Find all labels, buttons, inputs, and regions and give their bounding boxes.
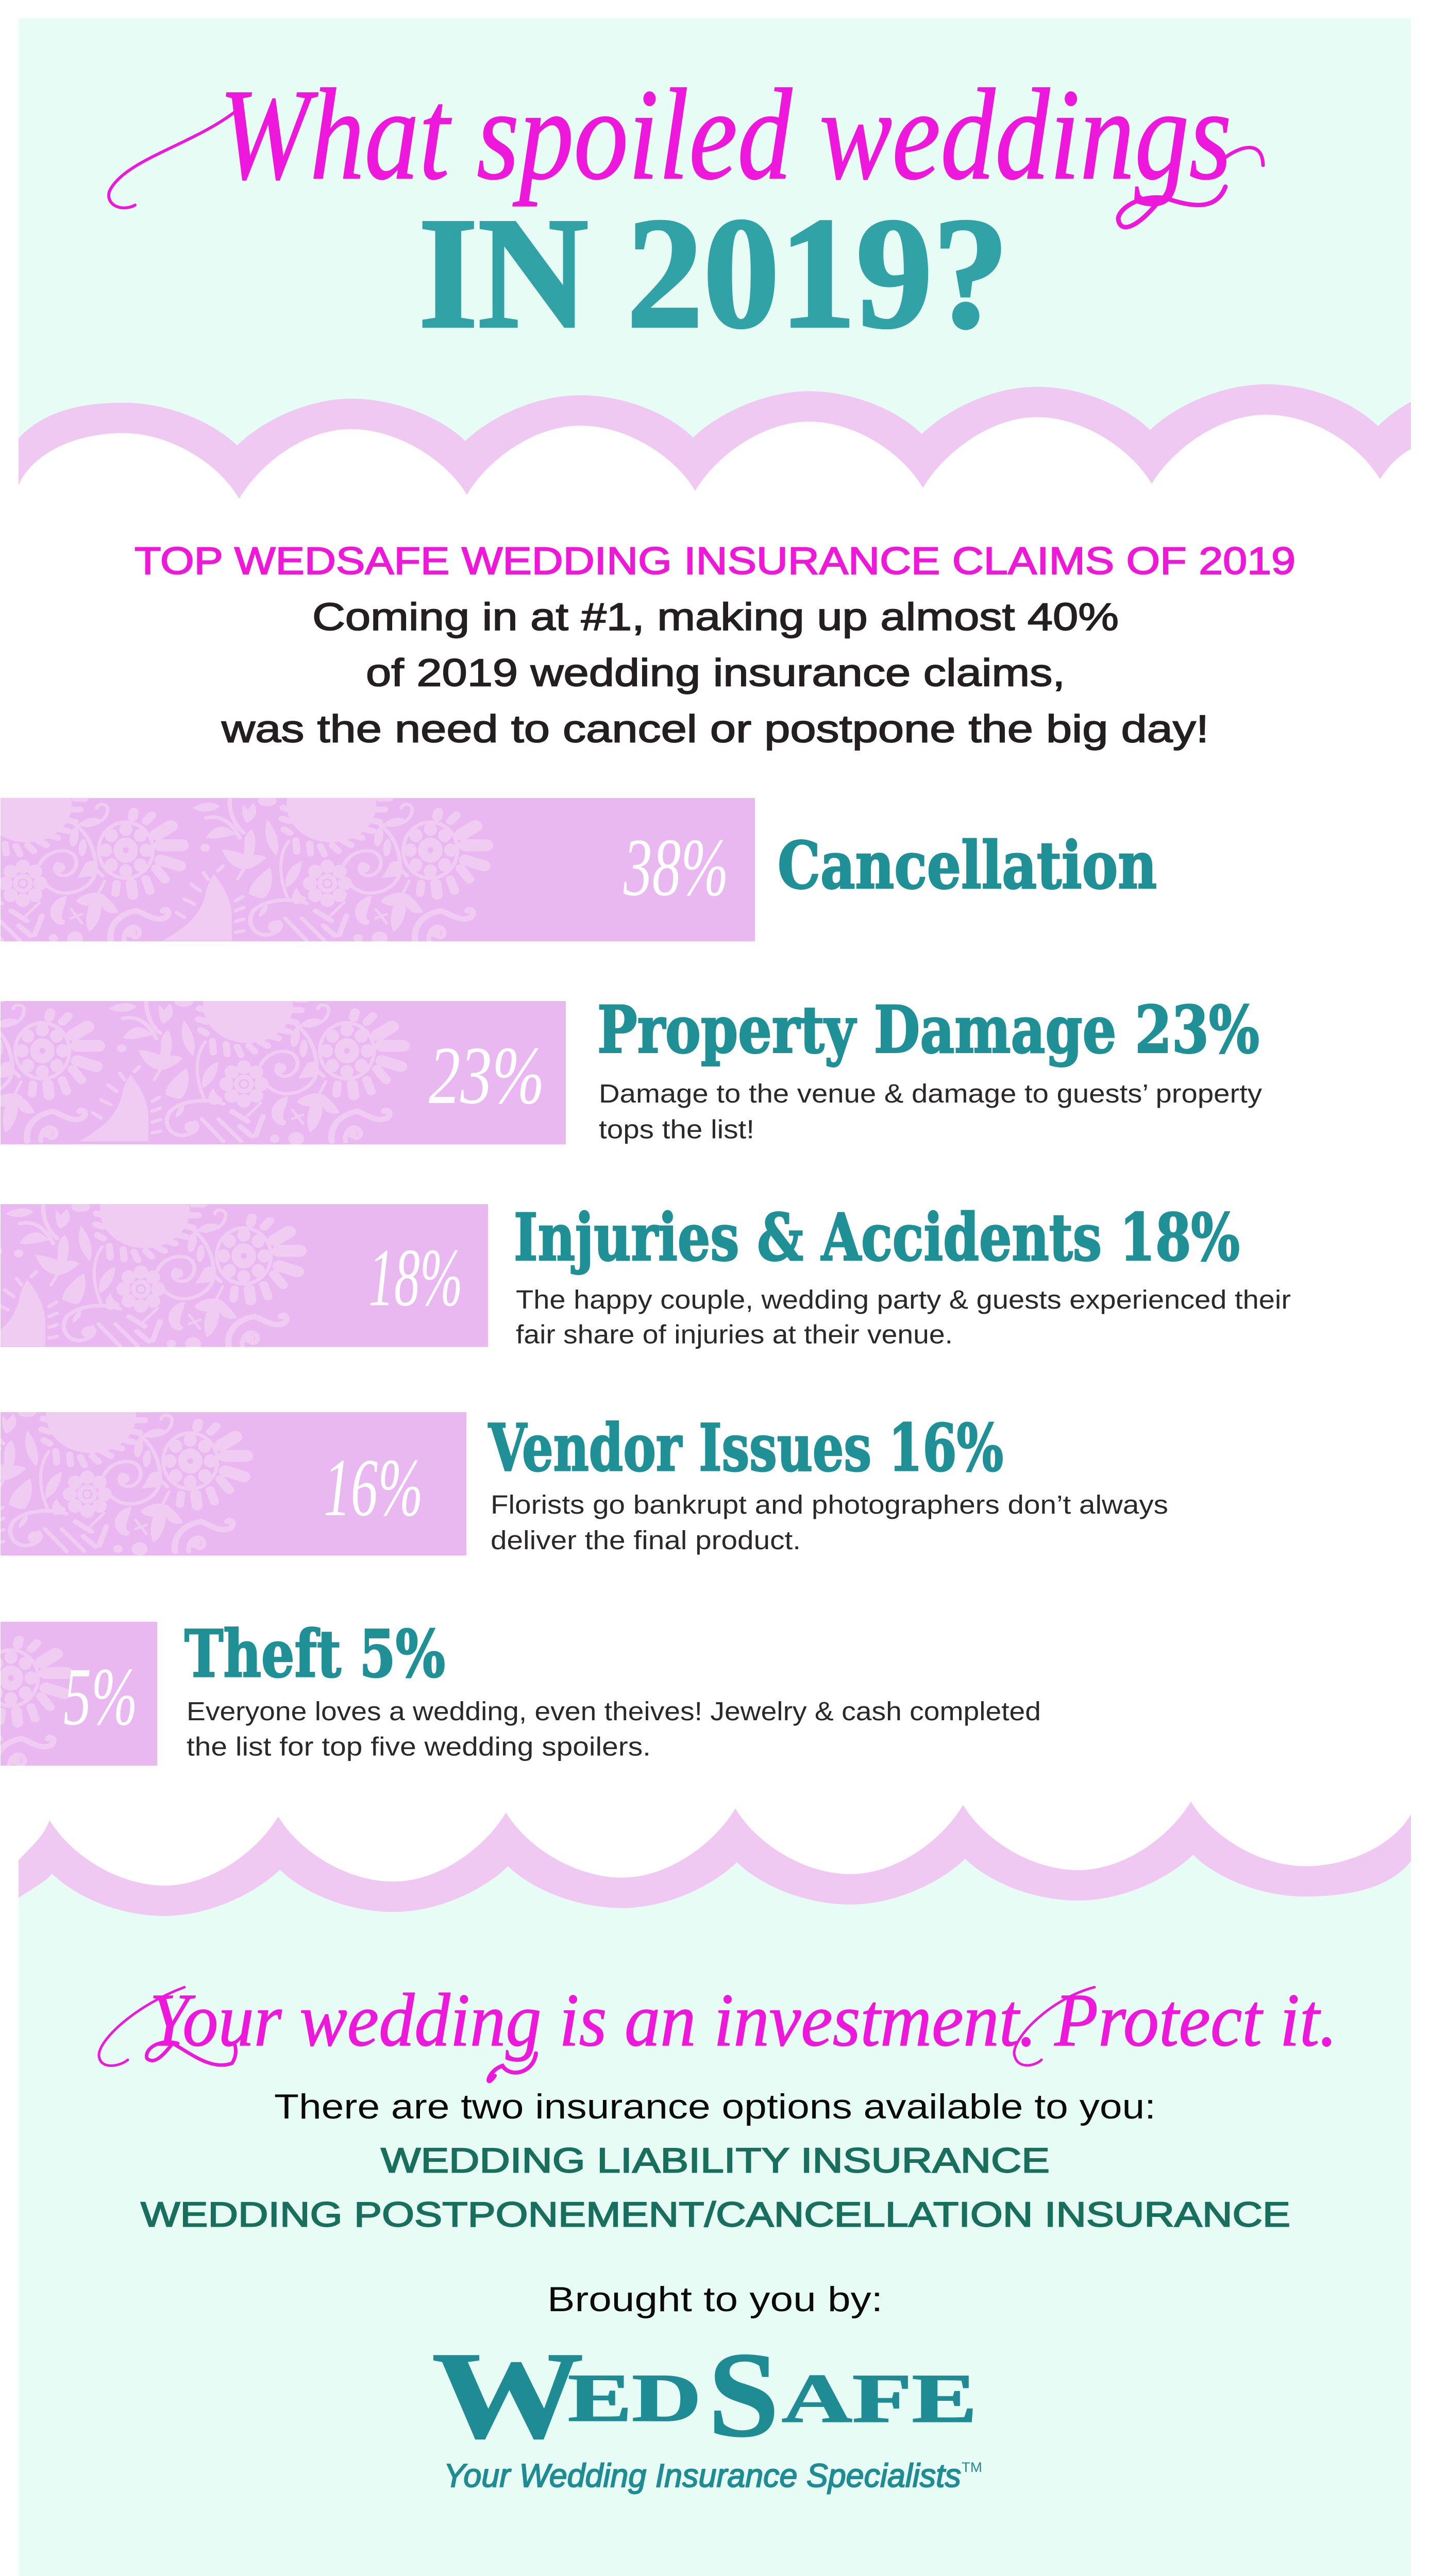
option: postponement: WEDDING POSTPONEMENT/CANCELLATION INSURANCE bbox=[141, 2195, 1290, 2234]
label: Theft: Everyone loves a wedding, even theives! Jewelry & cash completed bbox=[187, 1697, 1041, 1726]
logo: WedSafe: AFE bbox=[782, 2360, 977, 2437]
option: liability: WEDDING LIABILITY INSURANCE bbox=[381, 2141, 1050, 2180]
label: Vendor Issues bbox=[488, 1410, 1168, 1555]
label: Theft: Theft 5% bbox=[184, 1616, 445, 1692]
intro line 2: of 2019 wedding insurance claims, bbox=[366, 652, 1065, 694]
label: Theft: the list for top five wedding spoilers. bbox=[187, 1733, 651, 1762]
label: Injuries & Accidents: The happy couple, wedding party & guests experienced their bbox=[516, 1285, 1291, 1315]
intro text block bbox=[134, 539, 1296, 751]
bar: theft 5%: 5% bbox=[63, 1651, 138, 1742]
bar: vendor issues 16% bbox=[1, 1412, 466, 1556]
options text block bbox=[141, 2087, 1290, 2234]
tagline: Your wedding is an investment. Protect it.: Your wedding is an investment. Protect it. bbox=[149, 1978, 1337, 2062]
logo: WedSafe: S bbox=[708, 2327, 779, 2463]
mint footer background bbox=[19, 1855, 1411, 2576]
bar: theft 5% bbox=[1, 1622, 157, 1766]
label: Injuries & Accidents: fair share of injuries at their venue. bbox=[516, 1320, 953, 1350]
logo tagline: TM bbox=[962, 2460, 982, 2475]
label: Property Damage bbox=[597, 992, 1262, 1144]
logo: WedSafe bbox=[432, 2327, 977, 2464]
panel: top mint header with scalloped edge bbox=[19, 19, 1411, 499]
bar: injuries and accidents 18%: 18% bbox=[368, 1232, 463, 1324]
bar: property damage 23% bbox=[1, 1001, 566, 1145]
bar: cancellation 38%: 38% bbox=[623, 822, 729, 913]
label: Property Damage: tops the list! bbox=[599, 1115, 754, 1144]
decorative pink scallop band bbox=[19, 1802, 1411, 1941]
label: Property Damage: Property Damage 23% bbox=[597, 992, 1259, 1068]
label: Vendor Issues: Vendor Issues 16% bbox=[488, 1410, 1003, 1486]
logo: WedSafe: ED bbox=[568, 2361, 701, 2436]
intro line 3: was the need to cancel or postpone the big day! bbox=[221, 708, 1209, 751]
label: Vendor Issues: Florists go bankrupt and photographers don’t always bbox=[491, 1490, 1168, 1520]
logo tagline: Your Wedding Insurance Specialists bbox=[444, 2457, 961, 2494]
intro line 1: Coming in at #1, making up almost 40% bbox=[312, 596, 1119, 639]
credit line: Brought to you by: bbox=[547, 2280, 883, 2319]
decorative pink scallop band bbox=[19, 378, 1411, 499]
intro heading: TOP WEDSAFE WEDDING INSURANCE CLAIMS OF 2019 bbox=[134, 539, 1296, 583]
label: Theft bbox=[184, 1616, 1041, 1762]
label: Cancellation: Cancellation bbox=[778, 828, 1157, 904]
bar: injuries and accidents 18% bbox=[1, 1204, 488, 1347]
bar: cancellation 38% bbox=[1, 798, 755, 941]
bar: vendor issues 16%: 16% bbox=[324, 1443, 423, 1533]
title: IN 2019?: IN 2019? bbox=[418, 185, 1009, 362]
options intro: There are two insurance options available to you: bbox=[274, 2087, 1156, 2126]
panel: bottom mint footer with scalloped edge bbox=[19, 1802, 1411, 2576]
label: Vendor Issues: deliver the final product. bbox=[491, 1526, 801, 1555]
label: Property Damage: Damage to the venue & damage to guests’ property bbox=[599, 1079, 1262, 1109]
label: Injuries & Accidents bbox=[514, 1199, 1291, 1350]
mint header background bbox=[19, 19, 1411, 446]
logo: WedSafe: W bbox=[432, 2327, 584, 2464]
bar: property damage 23%: 23% bbox=[429, 1030, 545, 1121]
